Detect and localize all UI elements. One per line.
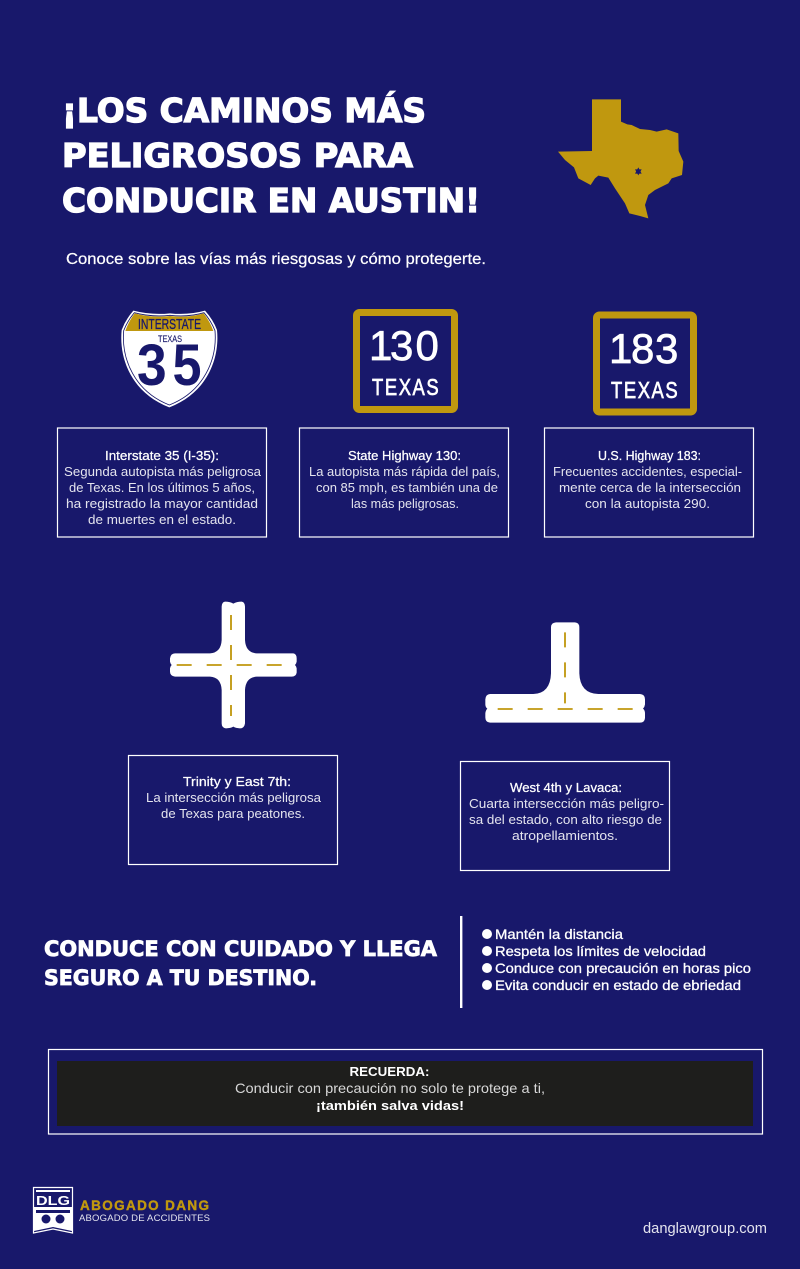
- panel: Interstate 35: [58, 428, 266, 537]
- website url: danglawgroup.com: [643, 1221, 767, 1237]
- panel: Trinity y East 7th: La intersección más peligrosa: [146, 790, 322, 805]
- subtitle: Conoce sobre las vías más riesgosas y cómo protegerte.: [66, 251, 486, 268]
- panel: Interstate 35: de Texas. En los últimos 5 años,: [69, 480, 255, 495]
- panel: U.S. Highway 183: con la autopista 290.: [585, 496, 710, 511]
- logo: DLG shield: [34, 1188, 72, 1233]
- brand name: ABOGADO DE ACCIDENTES: [79, 1213, 210, 1224]
- icon: Interstate 35 shield: 3: [137, 333, 167, 397]
- panel: U.S. Highway 183: U.S. Highway 183:: [598, 448, 701, 463]
- safety tips list: Respeta los límites de velocidad: [495, 943, 706, 959]
- panel: U.S. Highway 183: [544, 428, 754, 537]
- panel: State Highway 130: con 85 mph, es también una de: [316, 480, 498, 495]
- logo: DLG shield: DLG: [36, 1193, 70, 1208]
- panel: State Highway 130: State Highway 130:: [348, 448, 461, 463]
- icon: Highway 130 sign: TEXAS: [372, 375, 440, 401]
- icon: Highway 130 sign: 130: [369, 322, 439, 369]
- panel: State Highway 130: [300, 428, 508, 537]
- icon: Texas map with Austin star: [558, 99, 683, 218]
- icon: four-way intersection: [170, 602, 297, 728]
- icon: T intersection: [485, 622, 645, 723]
- panel: U.S. Highway 183: Frecuentes accidentes, especial-: [553, 464, 742, 479]
- panel: Interstate 35: Interstate 35 (I-35):: [105, 448, 219, 463]
- panel: Interstate 35: Segunda autopista más peligrosa: [64, 464, 262, 479]
- title: PELIGROSOS PARA: [62, 136, 413, 175]
- heading: call to action: [44, 937, 438, 990]
- callout: recuerda: [48, 1050, 762, 1134]
- divider line: [460, 916, 462, 1008]
- brand name: [79, 1198, 210, 1224]
- title: ¡LOS CAMINOS MÁS: [62, 90, 426, 130]
- safety tips list: Evita conducir en estado de ebriedad: [495, 977, 741, 993]
- panel: Trinity y East 7th: de Texas para peatones.: [161, 806, 305, 821]
- icon: Highway 183 sign: TEXAS: [611, 378, 679, 404]
- panel: U.S. Highway 183: mente cerca de la intersección: [559, 480, 741, 495]
- panel: West 4th y Lavaca: sa del estado, con alto riesgo de: [469, 812, 662, 827]
- icon: Highway 183 sign: 183: [609, 325, 678, 372]
- icon: Highway 183 sign: [596, 315, 694, 412]
- title: [62, 90, 480, 220]
- panel: Interstate 35: de muertes en el estado.: [88, 512, 236, 527]
- title: CONDUCIR EN AUSTIN!: [62, 181, 480, 220]
- panel: West 4th y Lavaca: West 4th y Lavaca:: [510, 780, 622, 795]
- brand name: ABOGADO DANG: [80, 1198, 209, 1213]
- panel: State Highway 130: las más peligrosas.: [351, 496, 459, 511]
- panel: Interstate 35: ha registrado la mayor cantidad: [66, 496, 258, 511]
- icon: Interstate 35 shield: [121, 311, 217, 407]
- icon: Highway 130 sign: [356, 312, 454, 410]
- safety tips list: Conduce con precaución en horas pico: [495, 960, 751, 976]
- panel: West 4th y Lavaca: [460, 762, 670, 870]
- safety tips list: Mantén la distancia: [495, 926, 623, 942]
- safety tips list: [482, 926, 751, 993]
- panel: State Highway 130: La autopista más rápida del país,: [309, 464, 500, 479]
- callout: recuerda: Conducir con precaución no solo te protege a ti,: [235, 1080, 545, 1096]
- icon: Interstate 35 shield: TEXAS: [158, 334, 182, 345]
- panel: West 4th y Lavaca: Cuarta intersección más peligro-: [469, 796, 664, 811]
- heading: call to action: CONDUCE CON CUIDADO Y LLEGA: [44, 937, 438, 961]
- icon: Interstate 35 shield: 5: [172, 332, 202, 398]
- panel: West 4th y Lavaca: atropellamientos.: [512, 828, 618, 843]
- panel: Trinity y East 7th: [128, 756, 338, 864]
- panel: Trinity y East 7th: Trinity y East 7th:: [183, 774, 291, 789]
- heading: call to action: SEGURO A TU DESTINO.: [44, 966, 317, 990]
- callout: recuerda: ¡también salva vidas!: [316, 1098, 464, 1113]
- callout: recuerda: RECUERDA:: [350, 1064, 430, 1079]
- icon: Interstate 35 shield: INTERSTATE: [138, 317, 201, 333]
